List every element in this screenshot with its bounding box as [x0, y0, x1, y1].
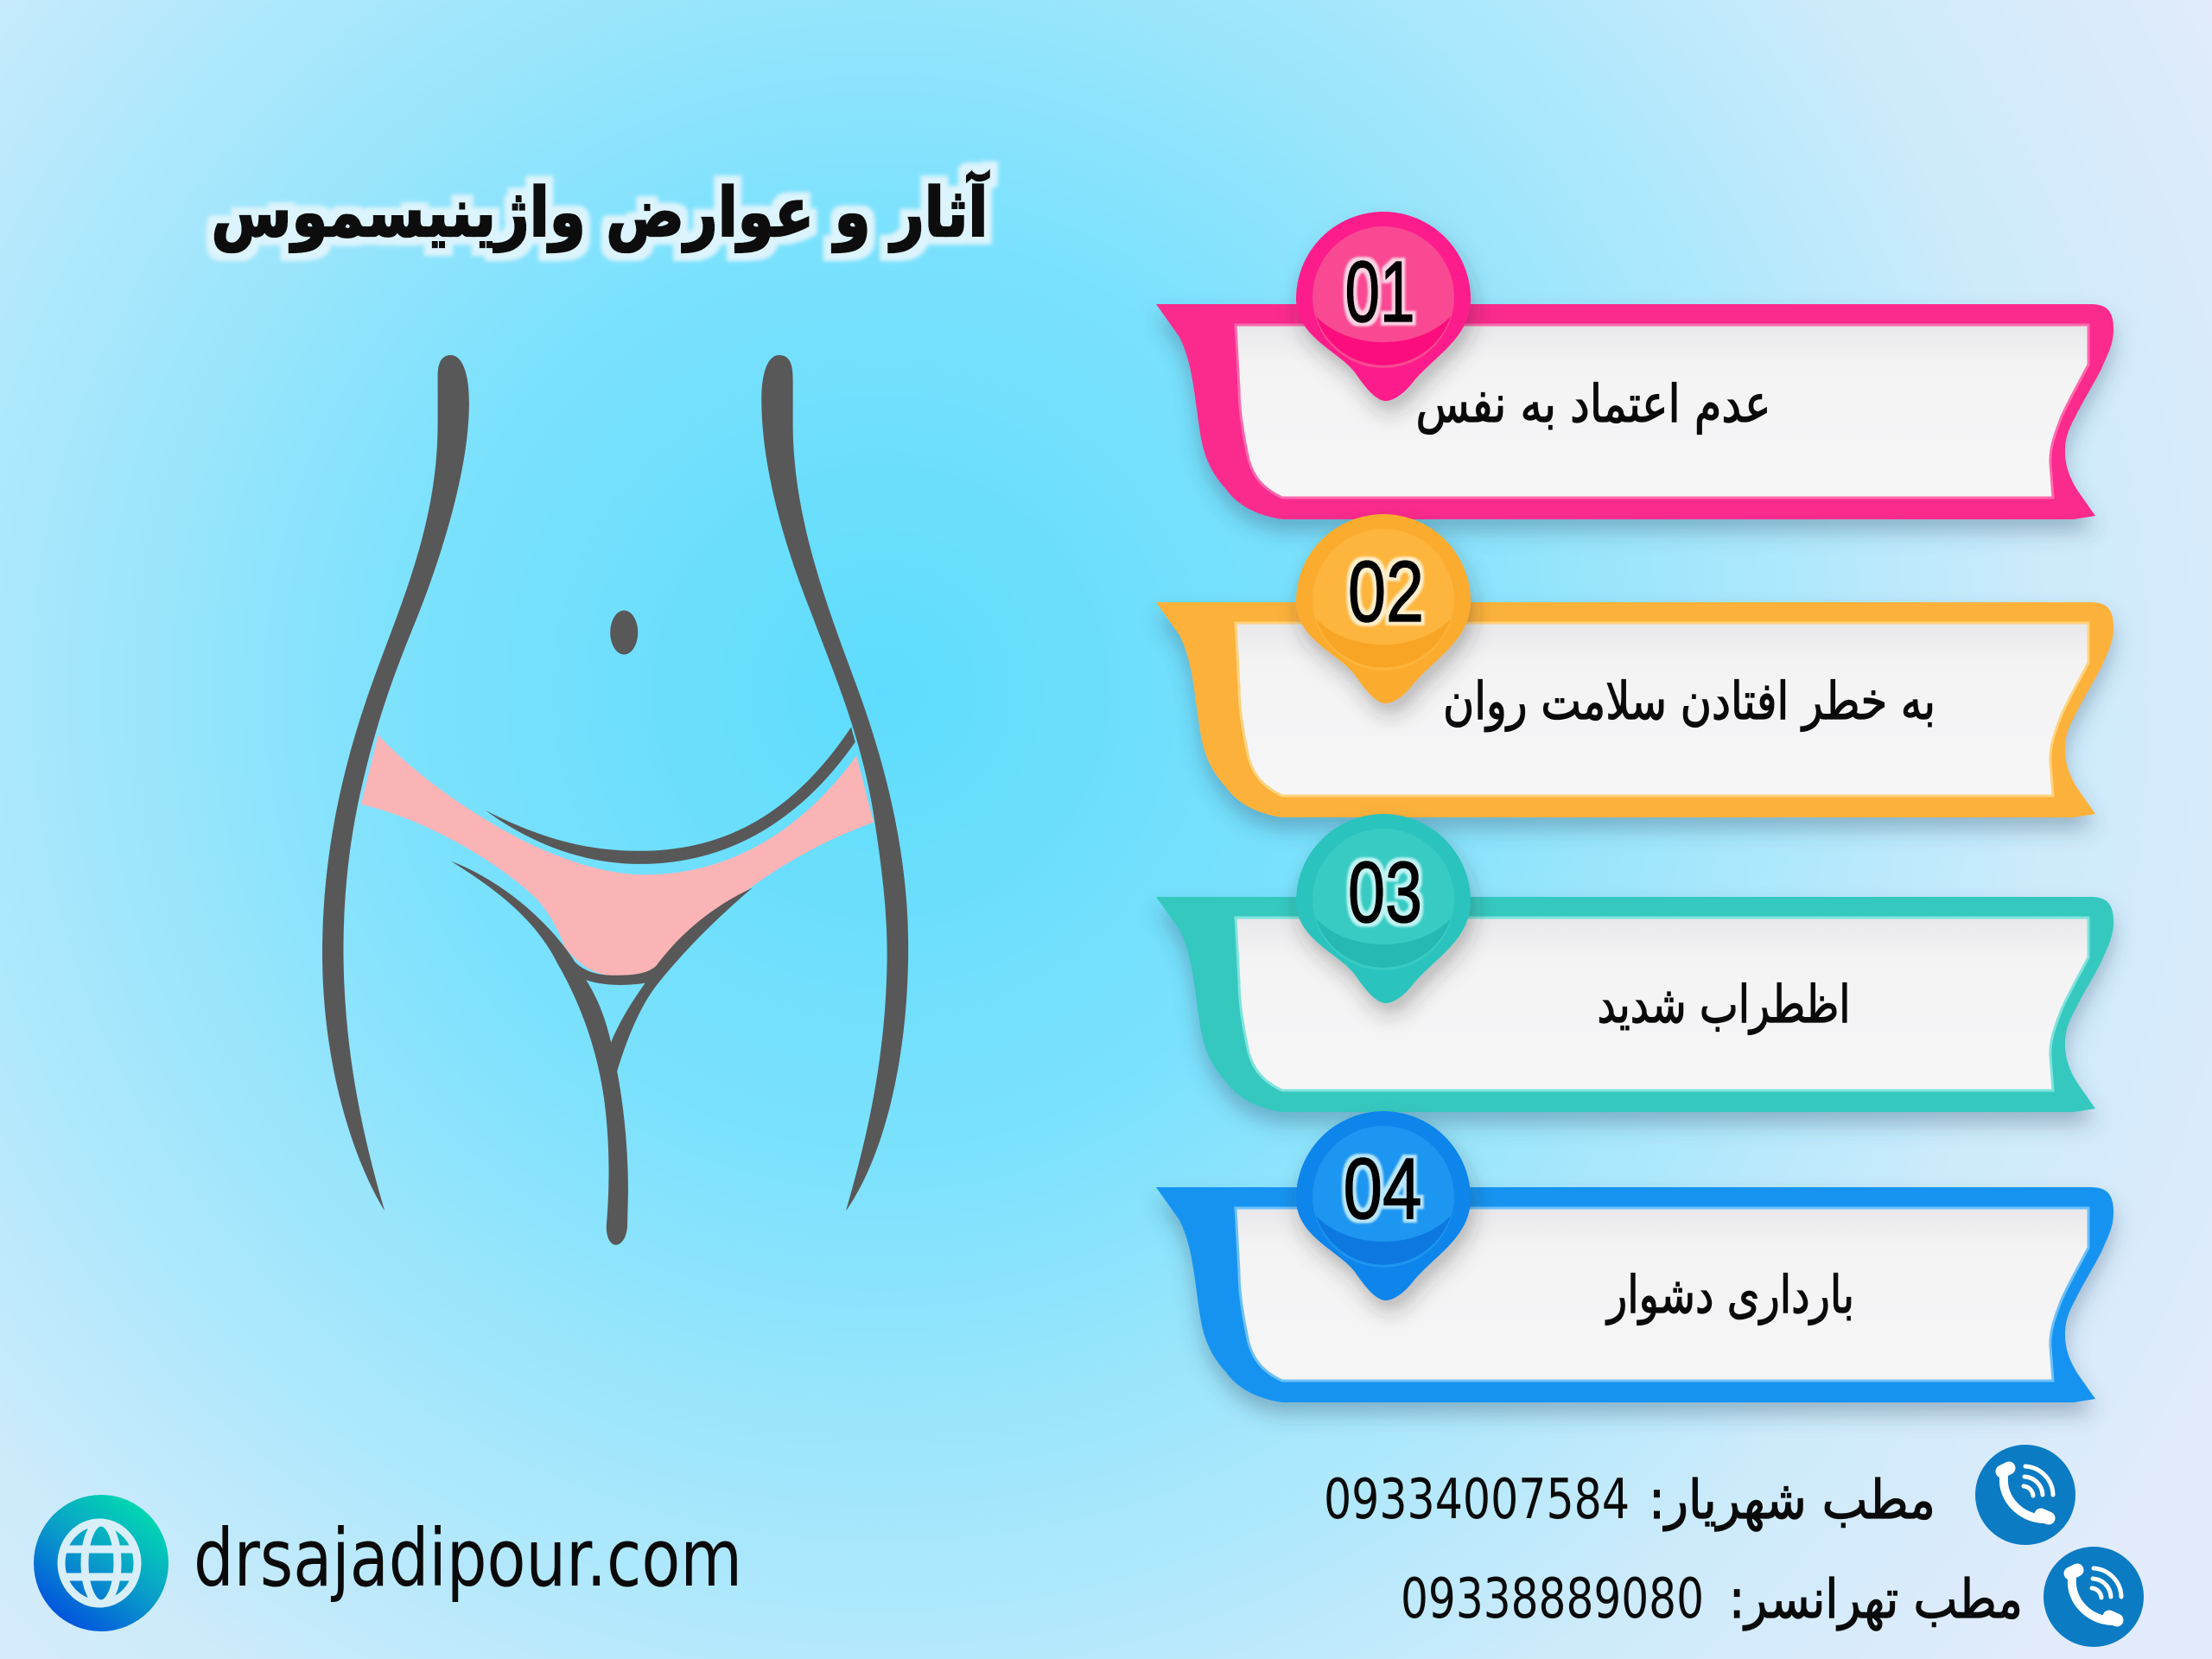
right body contour: [761, 355, 908, 1211]
underwear pink area: [361, 734, 874, 976]
icon: globe: [34, 1495, 168, 1631]
website url: drsajadipour.com: [194, 1512, 742, 1605]
office label 2: مطب تهرانسر:: [1729, 1567, 2023, 1631]
contact: Tehransar office: [1401, 1547, 2144, 1647]
panel: item 4: [1156, 1111, 2113, 1402]
illustration: body outline: [322, 355, 908, 1245]
text 4: بارداری دشوار: [1605, 1265, 1854, 1325]
pin 1: [1296, 212, 1471, 401]
contact: Shahriar office: [1324, 1445, 2075, 1545]
panel: item 2: [1156, 514, 2113, 817]
number 01: 01: [1344, 244, 1415, 340]
banner frame 4: [1156, 1187, 2113, 1402]
left body contour: [322, 355, 469, 1211]
pin 2: [1296, 514, 1471, 703]
navel: [610, 610, 638, 654]
pin 3: [1296, 814, 1471, 1003]
text 3: اظطراب شدید: [1597, 975, 1851, 1035]
office label 1: مطب شهریار:: [1649, 1468, 1936, 1532]
text 1: عدم اعتماد به نفس: [1415, 374, 1771, 435]
number 04: 04: [1343, 1141, 1422, 1237]
icon: phone 1: [1975, 1445, 2075, 1545]
waist curve: [486, 727, 855, 864]
banner frame 3: [1156, 897, 2113, 1112]
icon: phone 2: [2044, 1547, 2144, 1647]
website block: [34, 1495, 742, 1631]
panel: item 3: [1156, 814, 2113, 1112]
panel: item 1: [1156, 212, 2113, 519]
number 02: 02: [1348, 543, 1424, 640]
pin 4: [1296, 1111, 1471, 1300]
groin lines: [451, 861, 753, 1245]
phone number 1: 09334007584: [1324, 1468, 1630, 1532]
banner frame 2: [1156, 602, 2113, 817]
banner frame 1: [1156, 304, 2113, 519]
title: آثار و عوارض واژینیسموس: [211, 171, 989, 252]
phone number 2: 09338889080: [1401, 1567, 1704, 1631]
text 2: به خطر افتادن سلامت روان: [1443, 671, 1936, 732]
number 03: 03: [1348, 844, 1422, 941]
